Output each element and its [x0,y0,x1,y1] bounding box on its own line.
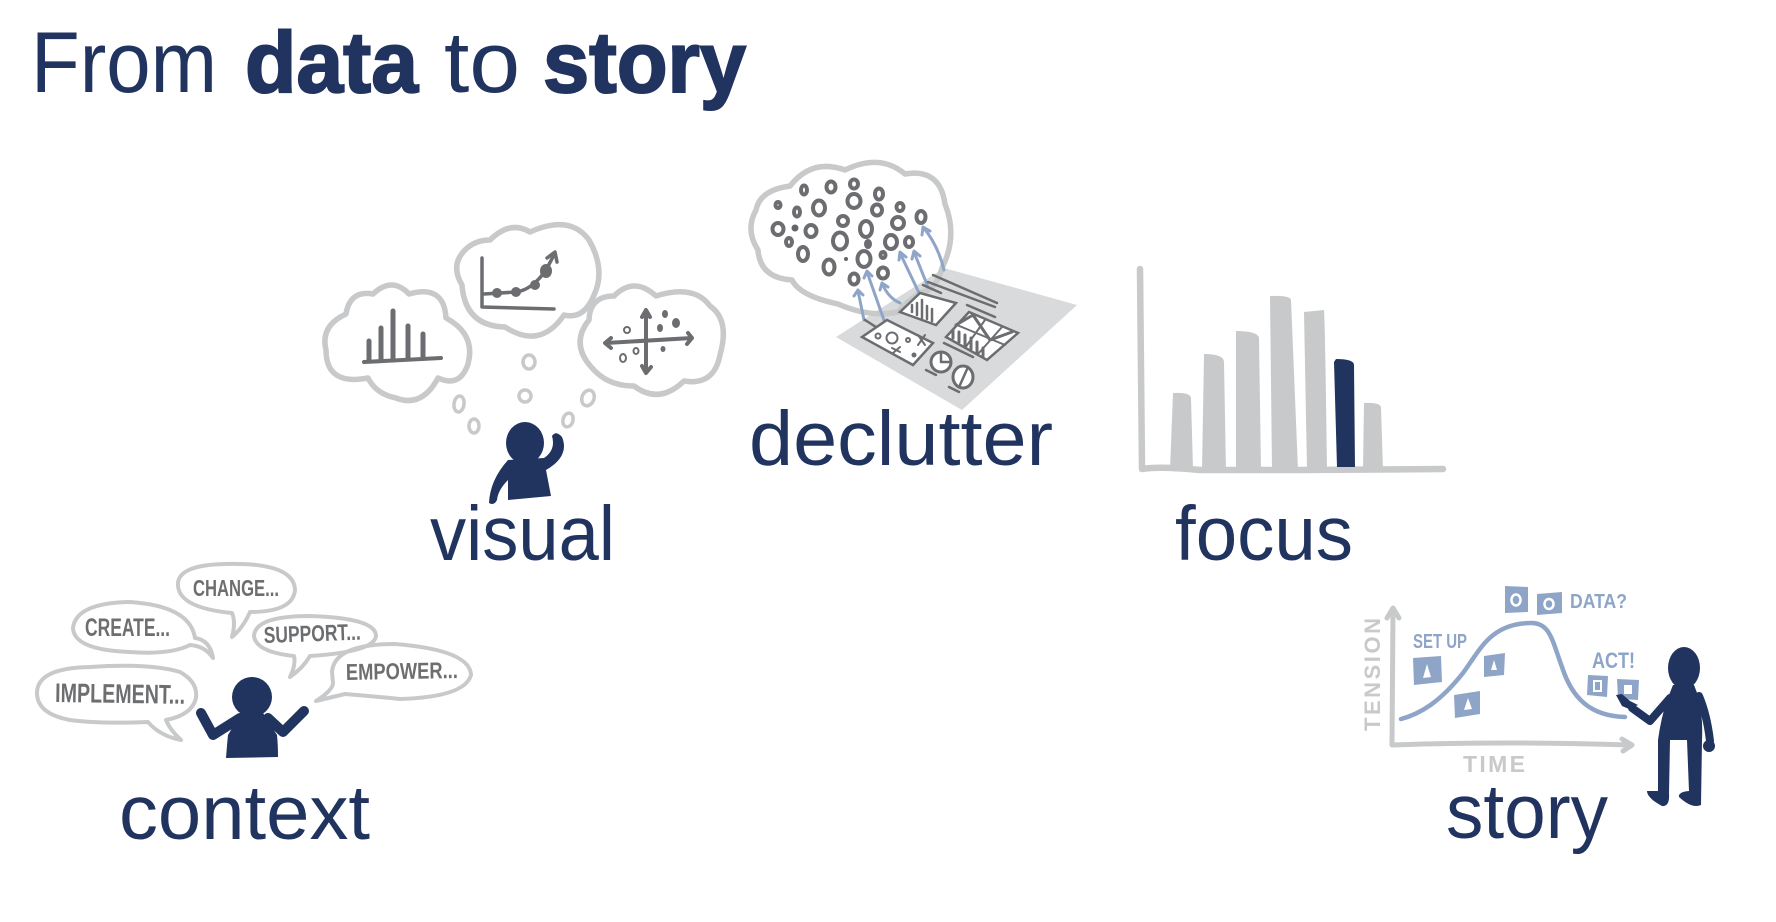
speech bubble: support [254,616,376,677]
label: story: story [1446,769,1608,855]
speech bubble: implement: IMPLEMENT... [55,678,185,710]
axis label: time: TIME [1463,751,1525,777]
data points in cloud [772,180,926,284]
label: act!: ACT! [1592,648,1635,673]
narrative arc axes [1387,608,1632,751]
label: set up: SET UP [1413,631,1467,653]
label: focus: focus [1175,491,1353,577]
label: declutter: declutter [749,396,1053,482]
story cards: act [1587,675,1639,700]
speech bubble: change [178,564,295,637]
grid chart on paper [946,312,1018,360]
panel: story [1360,586,1715,855]
thought cloud: line chart [457,225,599,336]
panel: visual [325,225,723,577]
person thinking [489,422,564,504]
title: to [444,15,520,111]
cluttered paper [836,268,1077,410]
small bar chart on paper [900,293,956,325]
speech bubble: change: CHANGE... [193,575,279,601]
label: visual: visual [430,491,615,577]
tension curve [1401,623,1625,719]
thought cloud: bar chart [325,285,470,400]
pie charts [931,352,973,388]
big thought cloud [751,162,951,314]
thought bubbles [453,355,596,433]
title: From [31,15,217,111]
person presenting [1616,647,1715,806]
scatter box on paper [862,320,933,365]
panel: declutter [749,162,1077,482]
gray bars [1170,296,1383,471]
label: data?: DATA? [1570,591,1627,613]
thought cloud: scatter plot [580,286,723,394]
title: data [245,15,419,111]
label: context: context [119,770,370,856]
highlighted bar [1334,359,1355,467]
axis label: tension: TENSION [1360,618,1385,731]
upward arrows [854,227,944,323]
panel: context [37,564,471,856]
speech bubble: create [73,602,213,658]
text lines on paper [865,275,997,392]
person shrugging [201,677,304,758]
speech bubble: create: CREATE... [85,614,170,642]
title: story [543,15,746,111]
panel: focus [1140,269,1443,577]
bar chart axes [1140,269,1443,470]
story cards: triangles [1413,653,1505,718]
speech bubble: empower [316,644,471,701]
speech bubble: empower: EMPOWER... [346,657,458,685]
speech bubble: support: SUPPORT... [263,619,361,648]
story cards: data [1505,586,1562,615]
speech bubble: implement [37,666,196,740]
